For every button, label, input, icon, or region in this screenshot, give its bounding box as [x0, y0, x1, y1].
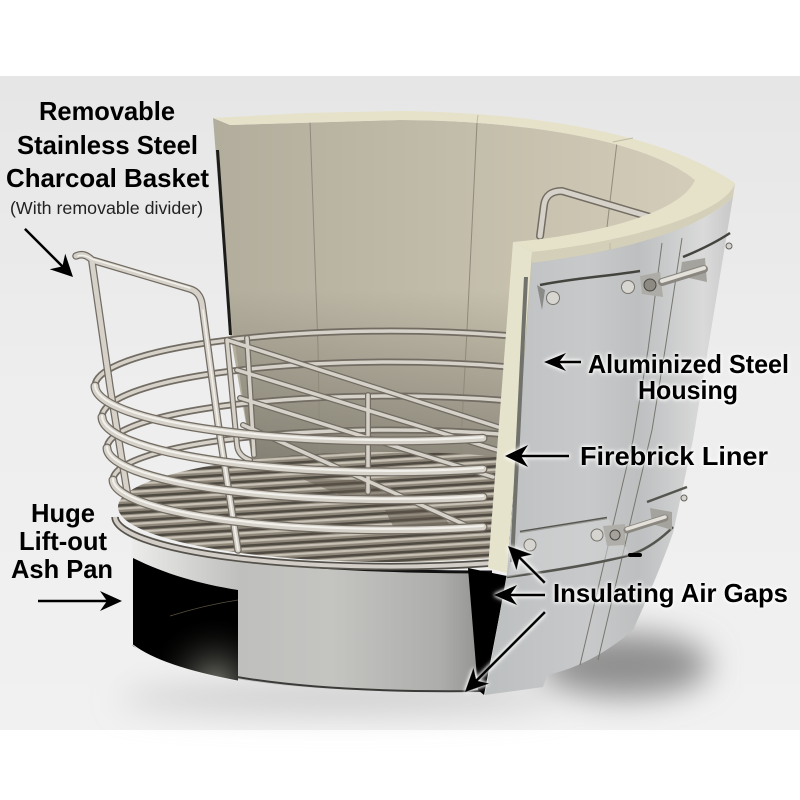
- label: ash pan: Ash Pan: [11, 554, 113, 584]
- basket handle: [76, 255, 238, 550]
- label: ash pan: [11, 498, 113, 584]
- arrow: to firebrick liner: [505, 445, 569, 467]
- label: ash pan: Lift-out: [19, 526, 107, 556]
- label: removable charcoal basket: Stainless Steel: [17, 130, 198, 160]
- arrow: upper air gap: [500, 538, 553, 591]
- arrow: to housing: [544, 353, 581, 371]
- liner rim: [213, 111, 735, 263]
- ash pan opening: [133, 558, 238, 681]
- arrow: to basket handle: [17, 221, 81, 285]
- label: aluminized steel housing: Aluminized Steel: [588, 349, 789, 379]
- label: aluminized steel housing: [588, 349, 789, 405]
- ash pan: [122, 528, 495, 691]
- ground shadow: [120, 633, 710, 710]
- back rings of basket: [95, 331, 505, 480]
- firebrick liner cut face: [488, 242, 532, 573]
- label: insulating air gaps: Insulating Air Gaps: [553, 578, 788, 608]
- aluminized steel housing: [485, 197, 733, 695]
- removable divider: [227, 338, 498, 527]
- label: ash pan: Huge: [31, 498, 95, 528]
- label: aluminized steel housing: Housing: [638, 375, 738, 405]
- arrow: to ash pan: [38, 591, 122, 611]
- label: removable charcoal basket: Removable: [39, 96, 175, 126]
- label: firebrick liner: Firebrick Liner: [580, 441, 768, 471]
- upper clamp band: [537, 233, 732, 310]
- label: removable charcoal basket: (With removable divider): [10, 198, 203, 218]
- rear handle of basket: [540, 191, 650, 236]
- dark slit at liner left edge: [216, 150, 232, 335]
- grate base plate rim: [115, 517, 492, 567]
- arrow: middle air gap: [494, 585, 545, 605]
- lower clamp band: [507, 487, 687, 577]
- label: removable charcoal basket: Charcoal Basket: [6, 163, 209, 193]
- arrow: lower air gap: [457, 604, 553, 700]
- firebrick liner interior wall: [213, 118, 700, 480]
- charcoal grate: [118, 452, 514, 562]
- label: removable charcoal basket: [6, 96, 209, 218]
- front rings of basket: [95, 385, 483, 530]
- air gap dark slot: [468, 568, 507, 695]
